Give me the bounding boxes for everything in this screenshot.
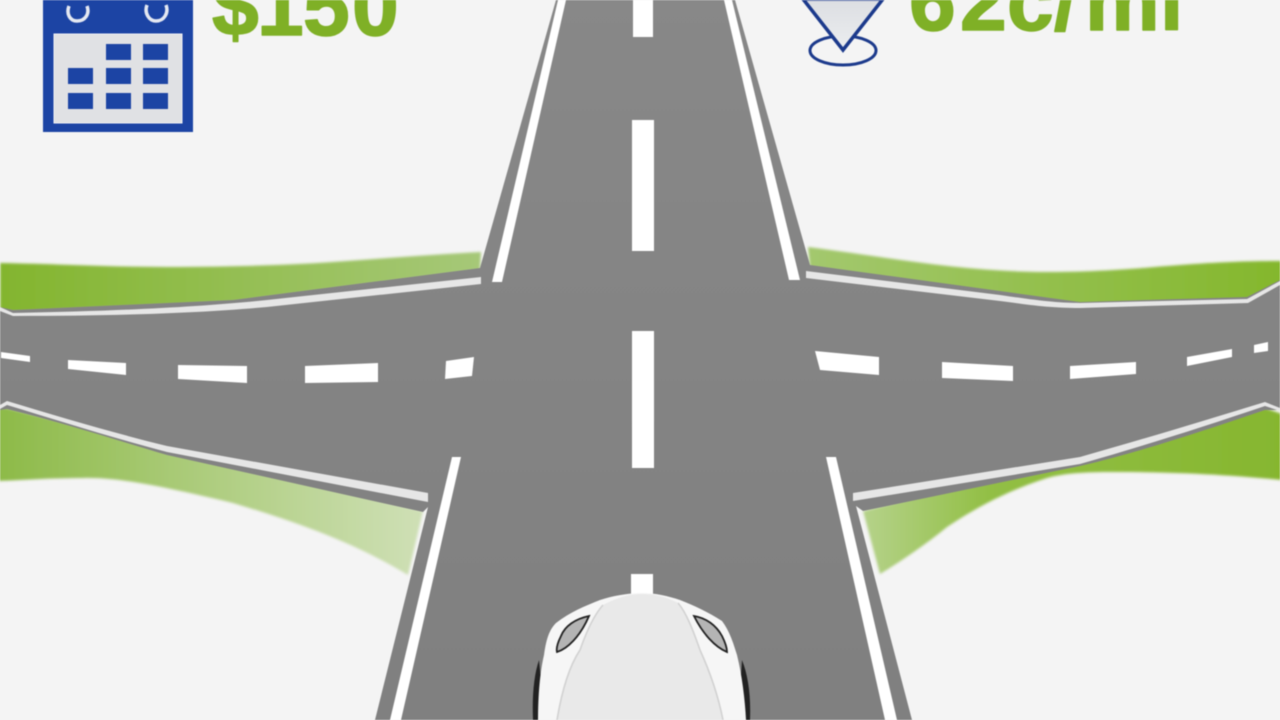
car xyxy=(533,593,750,720)
icon: left headlight xyxy=(557,616,589,652)
vertical road side lines xyxy=(390,0,897,720)
grass: top left verge xyxy=(0,252,481,312)
cross road dashes xyxy=(1,342,1268,383)
grass: top right verge xyxy=(808,247,1280,305)
grass: bottom right verge xyxy=(863,408,1280,574)
icon: calendar xyxy=(43,0,193,132)
road edge lines xyxy=(0,271,1280,502)
centre lane dashes xyxy=(631,0,654,598)
icon: location pin xyxy=(803,0,883,65)
icon: right headlight xyxy=(694,616,727,652)
grass: bottom left verge xyxy=(0,408,423,575)
